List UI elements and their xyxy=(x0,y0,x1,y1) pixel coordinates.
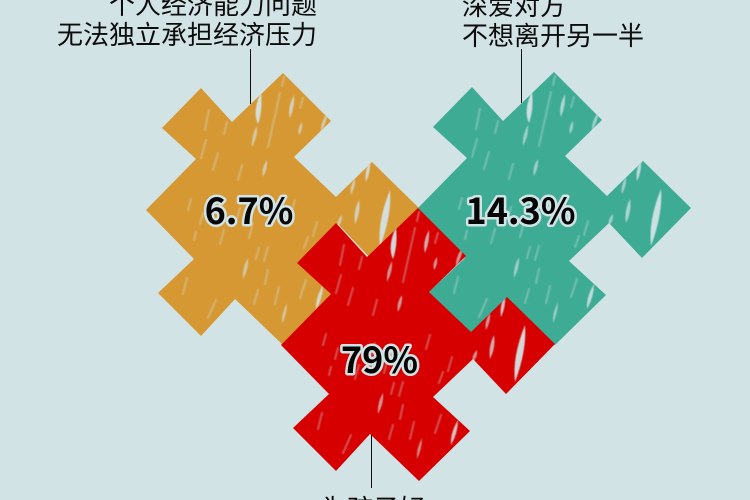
label: orange piece xyxy=(57,0,317,50)
label: orange piece: 无法独立承担经济压力 xyxy=(57,20,317,50)
leader line: red xyxy=(370,435,372,488)
puzzle piece: green xyxy=(417,72,691,345)
value: green 14.3%: 14.3% xyxy=(465,183,576,235)
label: green piece: 不想离开另一半 xyxy=(462,21,644,51)
value: red 79%: 79% xyxy=(341,332,418,384)
puzzle piece: red xyxy=(281,208,555,481)
leader line: orange xyxy=(250,49,252,104)
label: green piece xyxy=(462,0,644,51)
puzzle piece: orange xyxy=(146,73,420,346)
value: orange 6.7%: 6.7% xyxy=(205,183,293,235)
leader line: green xyxy=(520,49,522,103)
